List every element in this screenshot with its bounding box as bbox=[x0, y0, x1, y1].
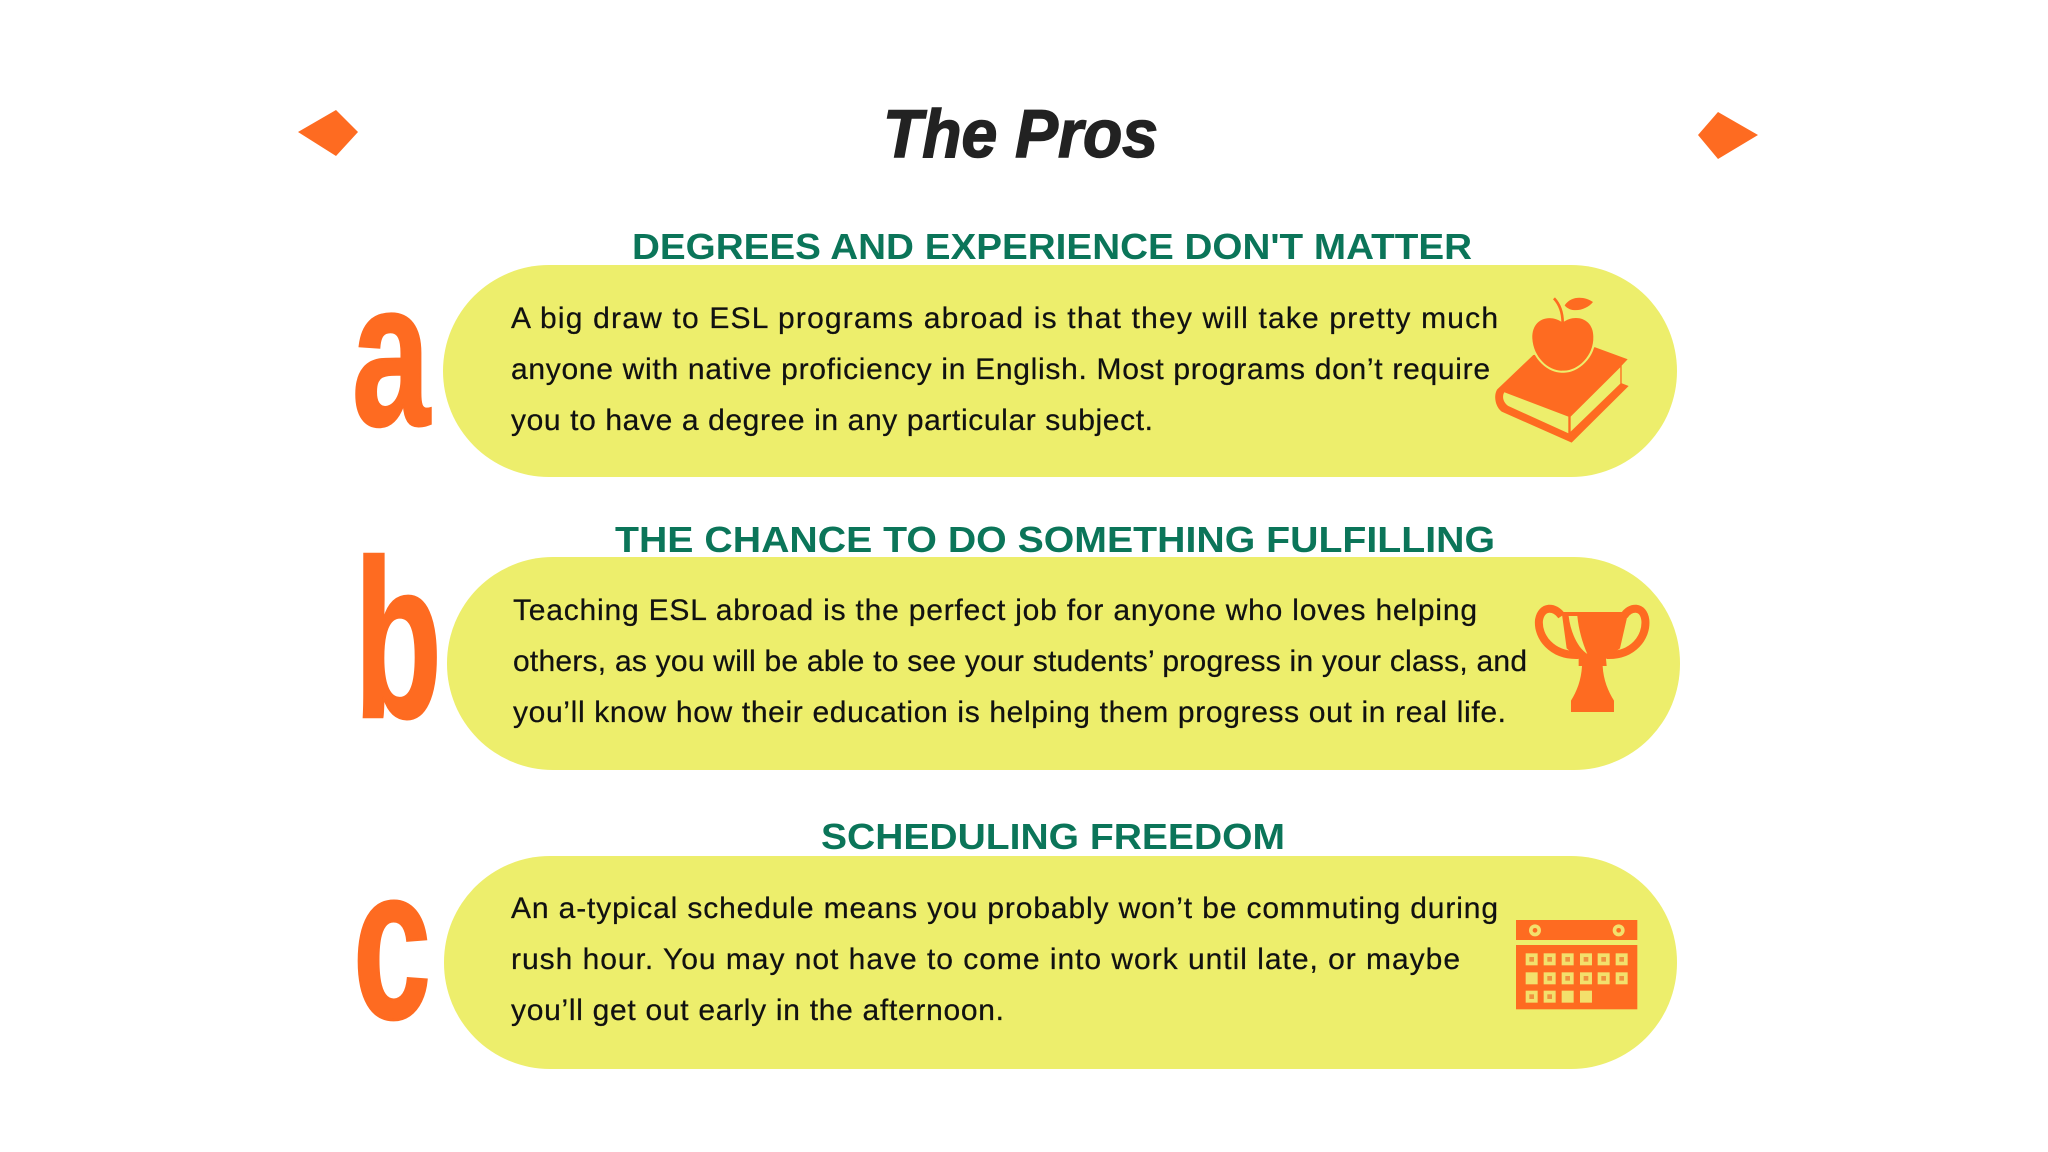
panel: fulfilling work bbox=[354, 513, 1680, 770]
icon: book and apple bbox=[1495, 298, 1629, 443]
panel: degrees and experience bbox=[352, 226, 1677, 477]
pill background c bbox=[444, 856, 1677, 1069]
body text b bbox=[513, 594, 1527, 729]
letter c: c bbox=[353, 822, 431, 1065]
pill background b bbox=[447, 557, 1680, 770]
icon: trophy bbox=[1539, 609, 1645, 712]
icon: right diamond bbox=[1698, 112, 1758, 159]
body text b: Teaching ESL abroad is the perfect job for anyone who loves helping bbox=[513, 594, 1477, 627]
icon: calendar bbox=[1516, 920, 1637, 1009]
heading a: DEGREES AND EXPERIENCE DON'T MATTER bbox=[632, 226, 1472, 267]
body text a: A big draw to ESL programs abroad is that they will take pretty much bbox=[511, 302, 1498, 335]
body text a bbox=[511, 302, 1498, 437]
body text b: others, as you will be able to see your students’ progress in your class, and bbox=[513, 645, 1527, 678]
heading c: SCHEDULING FREEDOM bbox=[821, 816, 1285, 857]
pill background a bbox=[443, 265, 1677, 477]
body text c: An a-typical schedule means you probably won’t be commuting during bbox=[511, 892, 1498, 925]
panel: scheduling freedom bbox=[353, 816, 1677, 1069]
body text a: anyone with native proficiency in English. Most programs don’t require bbox=[511, 353, 1490, 386]
body text b: you’ll know how their education is helping them progress out in real life. bbox=[513, 696, 1506, 729]
letter b: b bbox=[354, 513, 442, 765]
body text c: rush hour. You may not have to come into work until late, or maybe bbox=[511, 943, 1460, 976]
letter a: a bbox=[352, 238, 431, 469]
heading b: THE CHANCE TO DO SOMETHING FULFILLING bbox=[615, 519, 1495, 560]
body text a: you to have a degree in any particular subject. bbox=[511, 404, 1153, 437]
icon: left diamond bbox=[298, 110, 358, 156]
body text c bbox=[511, 892, 1498, 1027]
title: The Pros bbox=[883, 96, 1158, 172]
body text c: you’ll get out early in the afternoon. bbox=[511, 994, 1004, 1027]
